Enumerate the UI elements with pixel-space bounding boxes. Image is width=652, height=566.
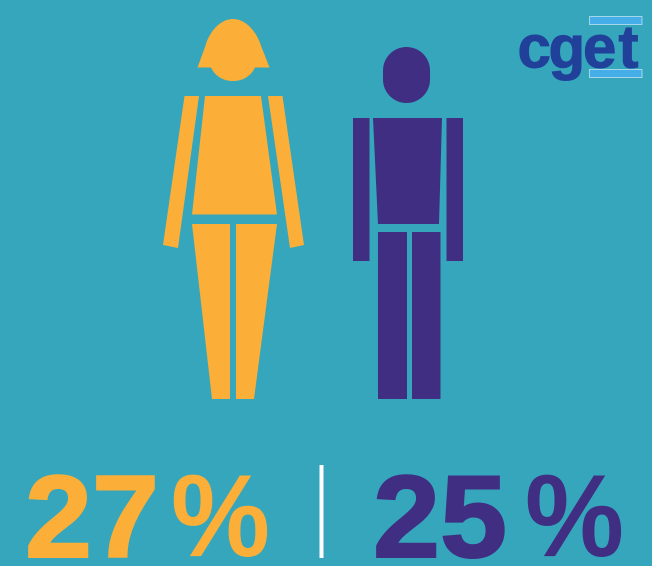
woman torso [192,96,277,214]
man right arm [446,118,463,261]
man torso [373,118,442,224]
man left leg [378,232,407,399]
logo: cget [518,14,642,80]
man head [383,47,430,103]
woman head and hair [198,19,270,81]
man right leg [412,232,440,399]
logo bottom bar [590,70,642,78]
divider [320,465,324,558]
logo wordmark: cget [518,14,638,80]
logo top bar [590,16,642,24]
woman right leg [236,224,277,399]
woman left leg [192,224,230,399]
icon: man figure [353,47,463,399]
woman left arm [163,96,199,248]
man left arm [353,118,370,261]
stat: women 27% [25,450,270,566]
icon: woman figure [163,19,304,399]
woman right arm [268,96,304,248]
stat: men 25% [373,450,624,566]
